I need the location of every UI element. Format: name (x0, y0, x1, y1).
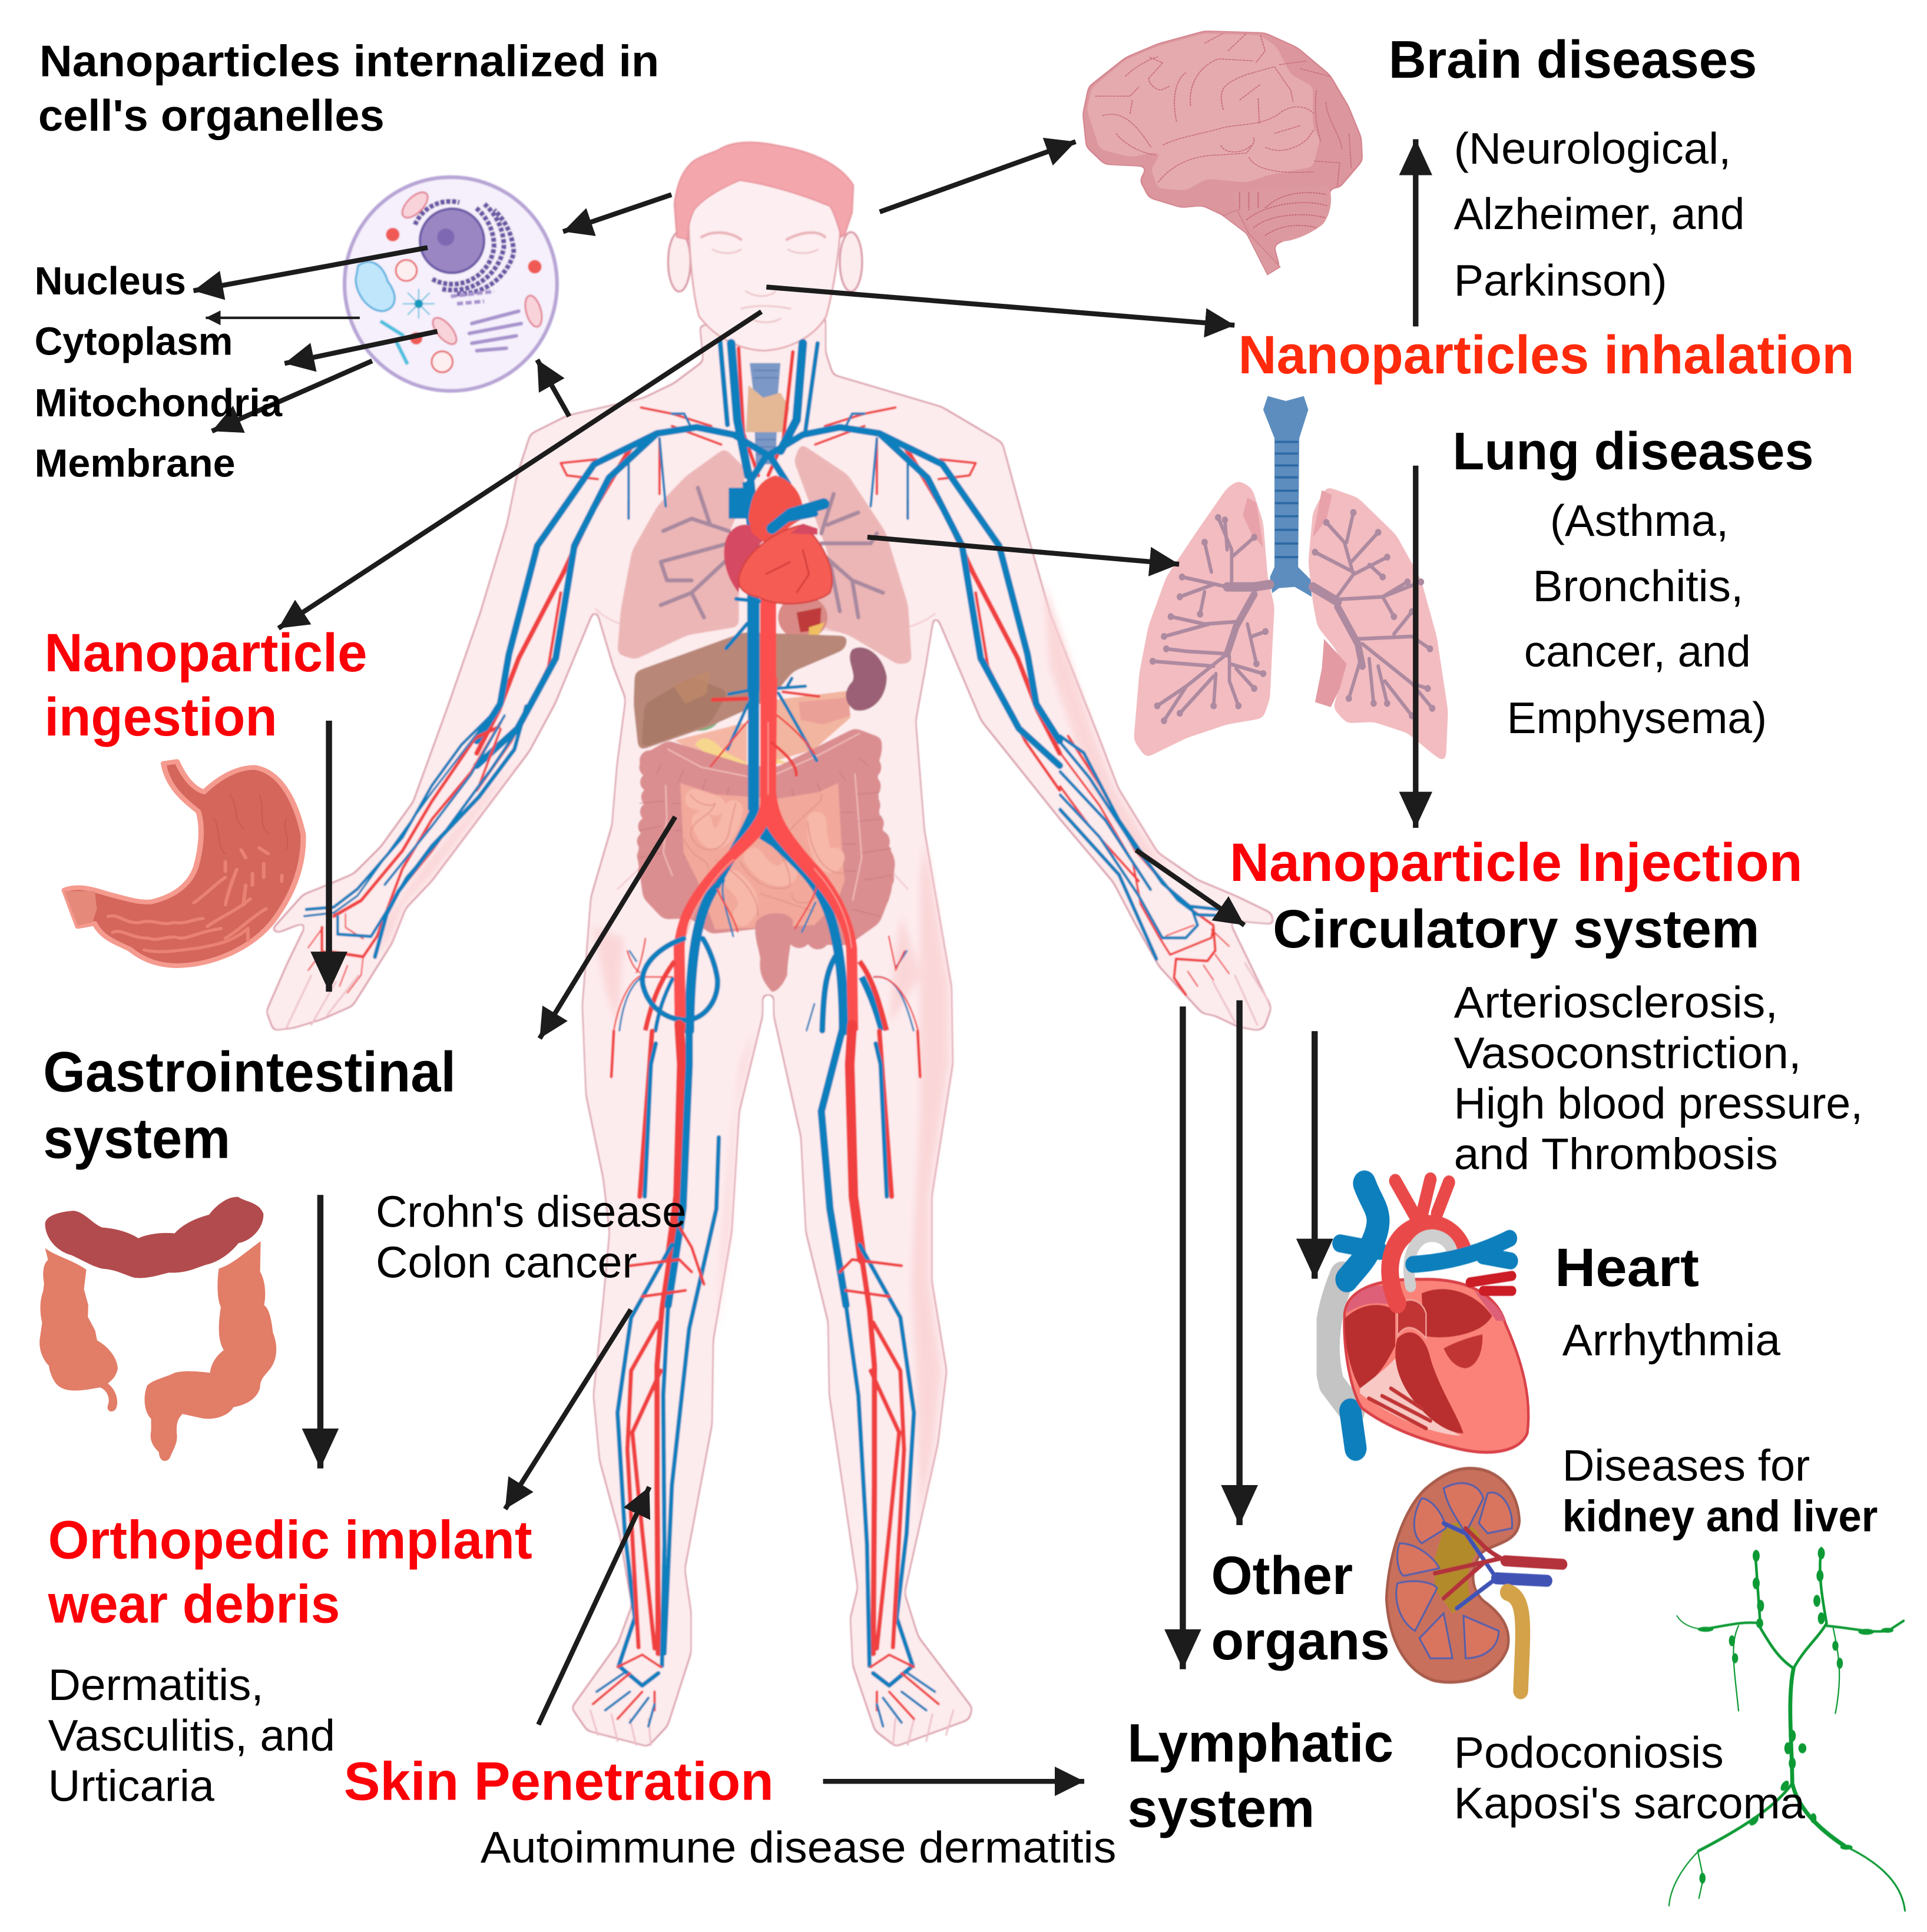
human body with circulatory system (266, 143, 1274, 1747)
arrow: GI system to orthopedic (319, 1195, 322, 1469)
text: brain disease list: Alzheimer, and (1454, 189, 1744, 238)
vesicles and dots (380, 228, 542, 372)
text: lymphatic disease list: Podoconiosis (1454, 1728, 1724, 1777)
heading: other organs: organs (1211, 1610, 1390, 1671)
limb shading (377, 581, 1173, 1519)
text: arrhythmia: Arrhythmia (1562, 1315, 1780, 1364)
colon base (637, 728, 896, 945)
left forearm and hand vessels (304, 707, 526, 993)
heading: brain diseases: Brain diseases (1389, 31, 1757, 90)
text: lung disease list: (Asthma, (1550, 496, 1729, 545)
abdominal vessels (614, 677, 918, 1030)
colon segment lines (640, 758, 891, 916)
arrow: knee to orthopedic (505, 1310, 631, 1509)
text: orthopedic disease list: Vasculitis, and (48, 1711, 335, 1760)
right arm vessels upper (749, 407, 1059, 790)
veins (620, 677, 913, 1030)
heading: lymphatic system: Lymphatic (1127, 1713, 1393, 1774)
liver and spleen (634, 595, 887, 751)
heading: gastrointestinal system: system (43, 1108, 230, 1171)
arrow: cell to cytoplasm label (206, 317, 360, 319)
text: kidney and liver diseases: Diseases for (1562, 1441, 1810, 1490)
text: kidney and liver diseases: kidney and liver (1562, 1491, 1878, 1540)
heading: skin penetration: Skin Penetration (344, 1751, 774, 1812)
arrow: inhalation to brain diseases (1415, 139, 1417, 326)
heart in body (724, 475, 832, 604)
text: lung disease list: cancer, and (1524, 627, 1751, 676)
heading: organelles: cell's organelles (38, 91, 385, 140)
heading: orthopedic implant wear debris: Orthopedic implant (48, 1509, 532, 1570)
vacuole (356, 262, 395, 311)
icon: colon (39, 1197, 276, 1461)
arrow: circulatory to lymphatic (1181, 1006, 1184, 1669)
small intestine (680, 783, 845, 930)
arrow: nose to inhalation (766, 287, 1234, 325)
icon: stomach (64, 761, 303, 966)
organelle labels: Nucleus (35, 259, 186, 303)
heading: other organs: Other (1211, 1545, 1353, 1606)
heading: nanoparticle ingestion: Nanoparticle (44, 622, 367, 683)
heading: heart: Heart (1555, 1237, 1699, 1298)
text: GI disease list: Colon cancer (376, 1237, 637, 1287)
heading: gastrointestinal system: Gastrointestinal (43, 1041, 456, 1104)
neck vessels (720, 341, 817, 475)
mitochondria (398, 188, 545, 348)
text: circulatory disease list: and Thrombosis (1454, 1129, 1778, 1178)
text: circulatory disease list: Vasoconstriction, (1454, 1028, 1802, 1078)
arrow: chest to lungs (868, 537, 1179, 564)
text: GI disease list: Crohn's disease (376, 1187, 686, 1237)
lungs in body (616, 442, 913, 665)
abdominal organs: intestines (637, 691, 896, 992)
text: lung disease list: Emphysema) (1507, 693, 1767, 743)
text: lymphatic disease list: Kaposi's sarcoma (1454, 1778, 1805, 1828)
arrow: skin to lymphatic (823, 1780, 1084, 1782)
arrow: skin penetration to leg (538, 1487, 650, 1725)
right bronchial tree (1313, 512, 1432, 716)
text: brain disease list: (Neurological, (1454, 124, 1731, 173)
text: circulatory disease list: Arteriosclerosis, (1454, 977, 1778, 1027)
colon scallops (647, 743, 884, 939)
icon: anatomical heart (1327, 1179, 1528, 1452)
icon: lymphatic vessels (1669, 1547, 1905, 1911)
arrow: circulatory to other organs (1238, 1000, 1241, 1525)
trachea and thyroid (746, 363, 789, 465)
nucleus (415, 201, 514, 294)
text: circulatory disease list: High blood pressure, (1454, 1079, 1863, 1128)
arrow: shoulder to cell (537, 360, 570, 416)
legs vessels left (593, 1025, 719, 1726)
organelle labels: Cytoplasm (35, 320, 233, 364)
heading: circulatory system: Circulatory system (1273, 899, 1759, 959)
golgi (469, 311, 521, 351)
left bronchial tree (1153, 518, 1270, 721)
icon: brain (1082, 31, 1363, 275)
text: orthopedic disease list: Dermatitis, (48, 1660, 264, 1709)
icon: cell with organelles (345, 177, 557, 391)
arrow: cell to mitochondria label (284, 332, 438, 363)
organelle labels: Membrane (35, 442, 236, 486)
heading: lymphatic system: system (1127, 1778, 1315, 1839)
arrow: intestine to GI system (539, 817, 675, 1039)
text: brain disease list: Parkinson) (1454, 256, 1667, 305)
icon: kidney (1386, 1469, 1562, 1691)
text: orthopedic disease list: Urticaria (48, 1761, 214, 1811)
trachea (1263, 396, 1312, 596)
fingers and toes (287, 963, 1270, 1745)
arrow: arm to injection (1136, 850, 1244, 925)
left arm vessels upper (476, 407, 788, 790)
body silhouette (266, 316, 1274, 1747)
arrow: mouth to ingestion (279, 311, 761, 628)
icon: lungs and trachea (1134, 396, 1448, 763)
arrow: lung diseases to injection (1415, 466, 1417, 828)
arrow: head to brain (880, 142, 1075, 212)
organelle labels: Mitochondria (35, 381, 283, 425)
heading: organelles: Nanoparticles internalized in (39, 37, 659, 86)
arrow: cell to nucleus label (193, 248, 428, 291)
legs vessels right (822, 1025, 939, 1726)
heading: orthopedic implant wear debris: wear debris (48, 1573, 340, 1634)
heading: lung diseases: Lung diseases (1453, 422, 1814, 481)
heading: nanoparticle injection: Nanoparticle Injection (1230, 832, 1803, 893)
text: skin disease: Autoimmune disease dermatitis (481, 1822, 1116, 1872)
chest contour lines (595, 609, 935, 889)
arrow: circulatory to heart (1313, 1031, 1316, 1279)
heading: nanoparticles inhalation: Nanoparticles inhalation (1239, 324, 1855, 385)
arrow: cell to membrane label (212, 361, 372, 431)
heading: nanoparticle ingestion: ingestion (44, 687, 277, 747)
arrow: head to cell (563, 195, 671, 231)
central vena cava and aorta (726, 482, 768, 691)
head with hair (668, 143, 862, 351)
arrow: ingestion to hand level (327, 721, 330, 992)
text: lung disease list: Bronchitis, (1533, 561, 1743, 611)
arteries (674, 677, 858, 1030)
right forearm and hand vessels (1060, 736, 1229, 995)
